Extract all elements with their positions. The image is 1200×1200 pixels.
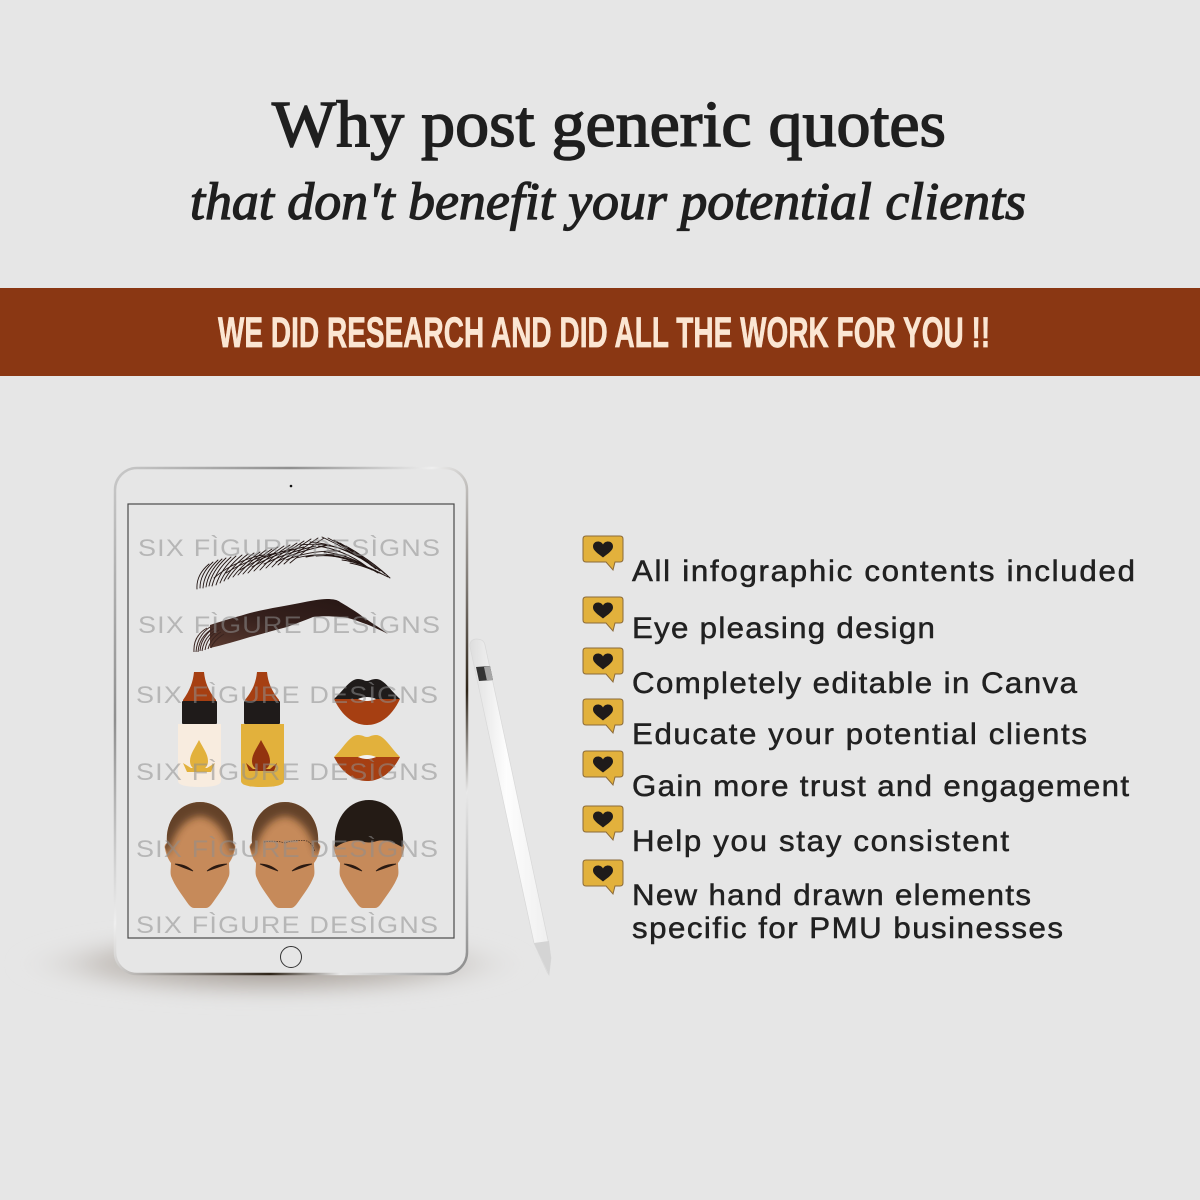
title: Why post generic quotes	[272, 88, 946, 161]
title	[190, 88, 1026, 231]
list item: design: Eye pleasing design	[632, 612, 935, 645]
icon: filled eyebrow	[194, 599, 388, 652]
watermarks	[136, 535, 440, 939]
list item: hand drawn	[583, 860, 1063, 945]
icon: black and rust lips	[334, 679, 400, 725]
icon: yellow pigment bottle	[241, 672, 284, 787]
watermarks: SIX FÌGURE DESÌGNS	[136, 759, 438, 786]
list item: hand drawn: specific for PMU businesses	[632, 912, 1063, 945]
watermarks: SIX FÌGURE DESÌGNS	[138, 612, 440, 639]
list item: educate: Educate your potential clients	[632, 718, 1087, 751]
icon: head with thin hair	[160, 796, 240, 908]
list item: hand drawn: New hand drawn elements	[632, 879, 1031, 912]
list item: all contents: All infographic contents included	[632, 555, 1135, 588]
list item: trust: Gain more trust and engagement	[632, 770, 1130, 803]
watermarks: SIX FÌGURE DESÌGNS	[136, 682, 438, 709]
screen	[128, 504, 454, 938]
icon: stylus pen	[470, 639, 551, 975]
watermarks: SIX FÌGURE DESÌGNS	[136, 836, 438, 863]
list item: editable	[583, 648, 1077, 700]
watermarks: SIX FÌGURE DESÌGNS	[136, 912, 438, 939]
icon: cream pigment bottle	[178, 672, 221, 787]
list item: design	[583, 597, 935, 645]
banner text: WE DID RESEARCH AND DID ALL THE WORK FOR YOU !!	[218, 308, 990, 356]
list item: all contents	[583, 536, 1135, 588]
infographic canvas	[0, 100, 1200, 1000]
banner	[0, 288, 1200, 376]
list item: editable: Completely editable in Canva	[632, 667, 1077, 700]
icon: hair stroke eyebrow	[197, 537, 390, 589]
icon: yellow and rust lips	[334, 735, 400, 781]
list item: trust	[583, 751, 1130, 803]
feature list	[583, 536, 1135, 945]
list item: consistent	[583, 806, 1010, 858]
home button	[280, 946, 302, 968]
icon: head with hairline guide	[245, 796, 325, 908]
camera	[290, 485, 292, 487]
list item: consistent: Help you stay consistent	[632, 825, 1010, 858]
watermarks: SIX FÌGURE DESÌGNS	[138, 535, 440, 562]
tablet shadow	[10, 926, 534, 1002]
list item: educate	[583, 699, 1087, 751]
icon: head with full hair	[334, 800, 404, 908]
subtitle: that don't benefit your potential clients	[190, 173, 1026, 231]
tablet	[115, 468, 467, 974]
